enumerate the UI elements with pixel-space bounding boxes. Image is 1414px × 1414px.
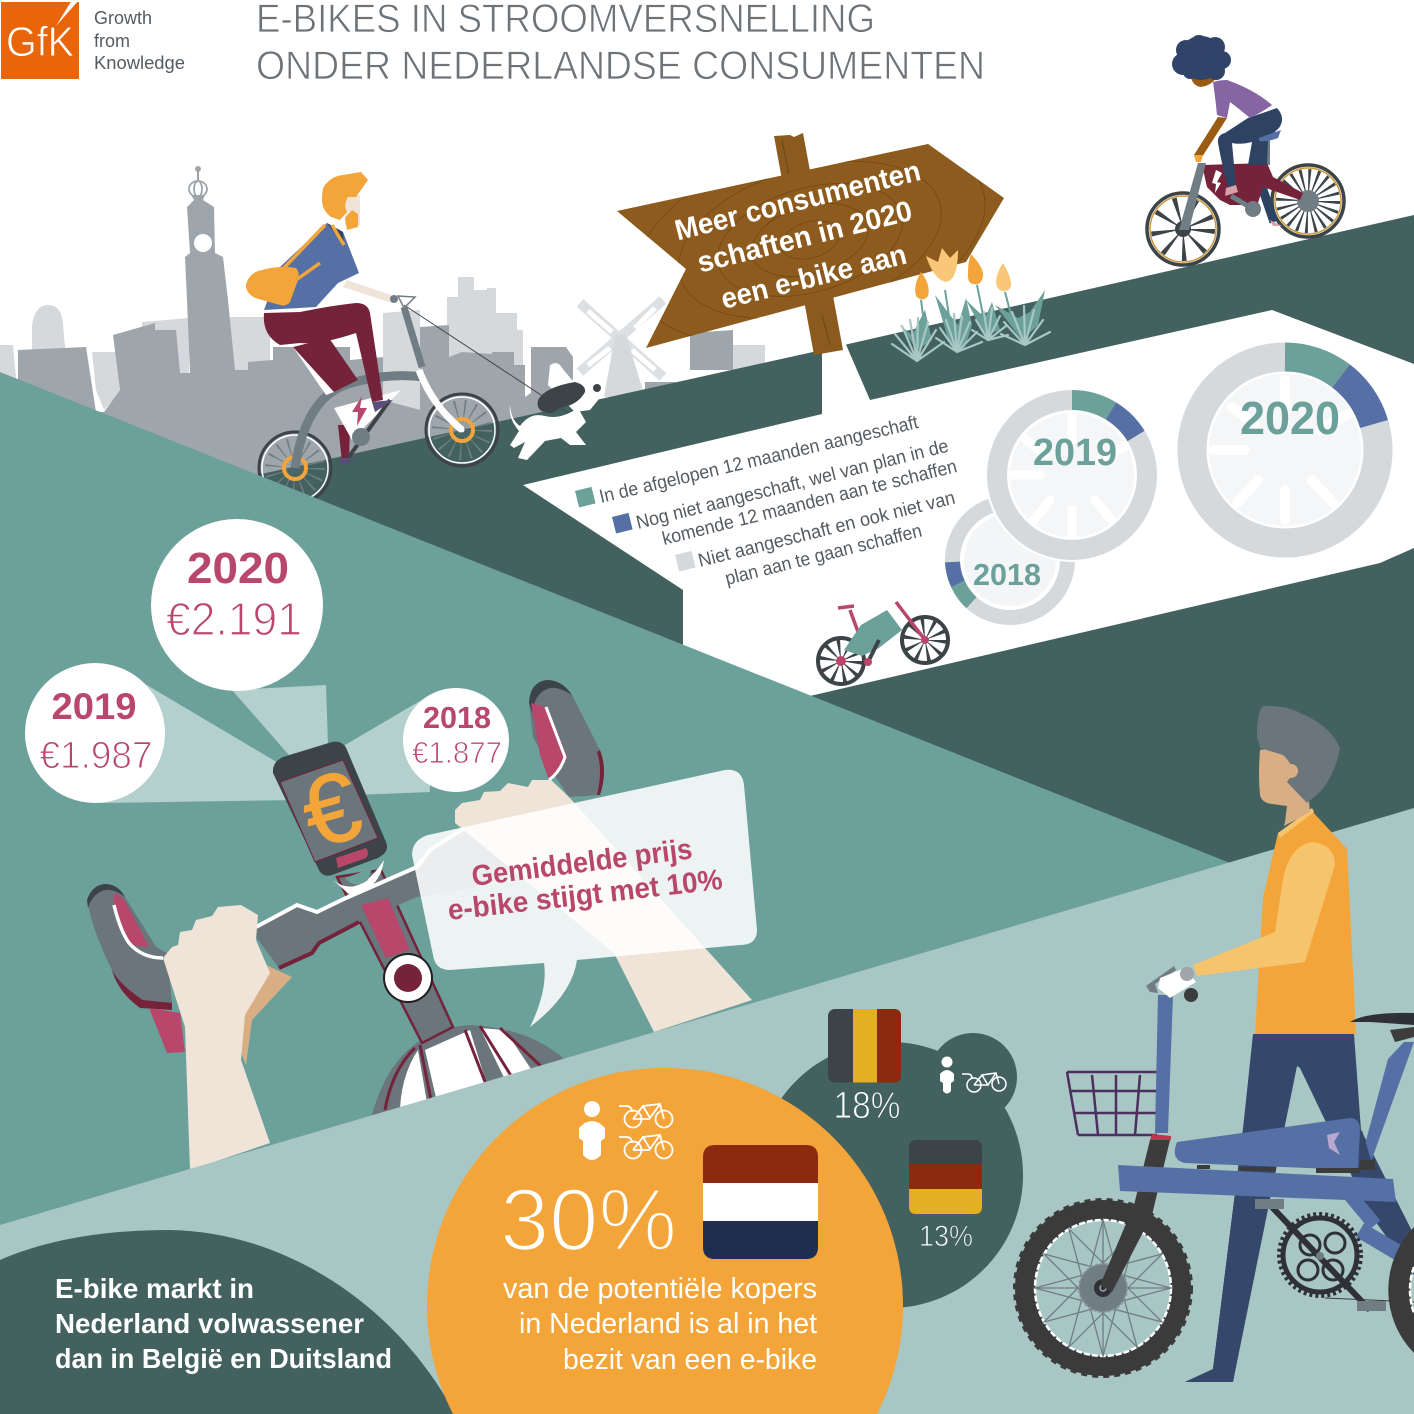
logo: GfK: from	[94, 31, 130, 51]
panel: white legend and donut area	[523, 310, 1414, 696]
donut labels: 2020	[1240, 392, 1340, 444]
right hand and arm	[455, 780, 752, 1032]
battery	[1175, 1118, 1375, 1173]
icon: small green e-bike	[818, 602, 948, 684]
sign text	[672, 155, 924, 316]
title	[256, 0, 985, 88]
frame bar	[1118, 1165, 1396, 1202]
skyline: city background	[0, 166, 765, 490]
bubble: price 2020: €2.191	[166, 593, 302, 645]
bubble: price 2020	[151, 519, 323, 691]
circle: E-bike market text: E-bike markt in	[55, 1273, 254, 1304]
hair	[1257, 706, 1340, 803]
donut labels	[973, 392, 1340, 592]
bubble: price 2018: 2018	[423, 700, 491, 735]
donut chart: 2018	[952, 502, 1068, 618]
sign text: een e-bike aan	[718, 239, 910, 316]
bubble: price 2019: €1.987	[40, 735, 152, 777]
legend: Nog niet aangeschaft, wel van plan in de	[634, 436, 951, 534]
rear wheel	[1388, 1227, 1414, 1353]
sign: arrow board	[617, 144, 1004, 348]
teal and blue segments 2018	[958, 584, 972, 603]
icon: person with e-bike	[940, 1056, 1006, 1094]
front wheel	[1015, 1200, 1191, 1376]
dog with leash	[404, 305, 603, 460]
phone with euro	[273, 742, 387, 895]
callout: average price: e-bike stijgt met 10%	[446, 864, 724, 927]
circle: E-bike market text: dan in België en Duitsland	[55, 1343, 392, 1374]
callout: average price	[412, 770, 757, 1027]
vest	[1255, 811, 1356, 1034]
bubble: price 2019: 2019	[52, 686, 136, 727]
handlebar	[1146, 966, 1198, 1002]
title: ONDER NEDERLANDSE CONSUMENTEN	[256, 44, 985, 88]
left grip	[87, 884, 185, 1053]
basket	[1067, 1072, 1157, 1135]
logo: GfK: GfK	[6, 18, 74, 65]
logo: GfK: Knowledge	[94, 53, 185, 73]
rider: woman on e-bike	[1147, 35, 1344, 265]
legend: plan aan te gaan schaffen	[723, 521, 924, 590]
right grip	[529, 680, 604, 797]
front wheel man	[426, 394, 498, 466]
flag: Germany	[909, 1140, 982, 1253]
blob: dark green neighbouring countries	[757, 1033, 1023, 1308]
bike seat	[1350, 1013, 1414, 1025]
chain ring	[1255, 1195, 1414, 1311]
legend: In de afgelopen 12 maanden aangeschaft	[597, 412, 921, 508]
rear wheel	[1272, 165, 1344, 237]
sign text: Meer consumenten	[672, 155, 924, 247]
logo: GfK	[1, 0, 185, 79]
legend: Niet aangeschaft en ook niet van	[696, 488, 957, 572]
rear wheel man	[259, 432, 331, 504]
front wheel	[1147, 193, 1219, 265]
bubble: price 2019	[25, 663, 165, 803]
legend	[575, 412, 959, 590]
circle: 30% Netherlands: 30%	[500, 1170, 677, 1269]
teal section background	[0, 372, 1235, 1414]
hair	[1172, 35, 1231, 80]
flag: Belgium: 18%	[834, 1085, 900, 1127]
circle: 30% Netherlands	[427, 1068, 903, 1414]
left hand and arm	[163, 905, 292, 1170]
arm	[1193, 842, 1335, 976]
callout: average price: Gemiddelde prijs	[470, 833, 694, 893]
spotlights from phone to price bubbles	[100, 672, 430, 803]
donut chart: 2020	[1192, 357, 1378, 543]
stem detail: battery and hub	[361, 898, 433, 1003]
front stem	[1155, 995, 1173, 1133]
circle: E-bike market text	[0, 1230, 455, 1414]
handlebar	[256, 810, 540, 968]
phone with euro: €	[290, 749, 372, 869]
donut chart: 2019	[985, 388, 1159, 562]
trousers	[1185, 1034, 1414, 1382]
rider: man with orange hair and folding e-bike	[246, 172, 498, 504]
circle: E-bike market text: Nederland volwassener	[55, 1308, 364, 1339]
stem	[337, 870, 453, 1043]
circle: 30% Netherlands: van de potentiële kopers	[503, 1273, 817, 1305]
sign post	[774, 133, 843, 355]
circle: 30% Netherlands: in Nederland is al in het	[519, 1308, 817, 1340]
donut labels: 2019	[1033, 432, 1117, 474]
icon: person with two e-bikes	[579, 1101, 672, 1160]
bubble: price 2018: €1.877	[412, 735, 502, 770]
sign text: schaften in 2020	[694, 195, 915, 279]
circle: 30% Netherlands: bezit van een e-bike	[563, 1344, 817, 1376]
donut labels: 2018	[973, 557, 1041, 592]
neck and face	[1259, 745, 1310, 826]
flag: Germany: 13%	[919, 1220, 973, 1253]
icon: tulips and grass	[892, 248, 1050, 361]
light teal section background	[0, 808, 1414, 1414]
windmill	[580, 300, 663, 397]
bubble: price 2018	[403, 688, 509, 792]
legend: komende 12 maanden aan te schaffen	[660, 456, 959, 550]
logo: GfK: Growth	[94, 8, 152, 28]
hills: dark green background	[200, 215, 1414, 870]
helmet	[372, 1025, 565, 1125]
person: man with vest walking e-bike	[1015, 706, 1414, 1382]
flag: Belgium	[828, 1009, 901, 1127]
flag: Netherlands	[703, 1145, 818, 1259]
bubble: price 2020: 2020	[187, 544, 289, 593]
